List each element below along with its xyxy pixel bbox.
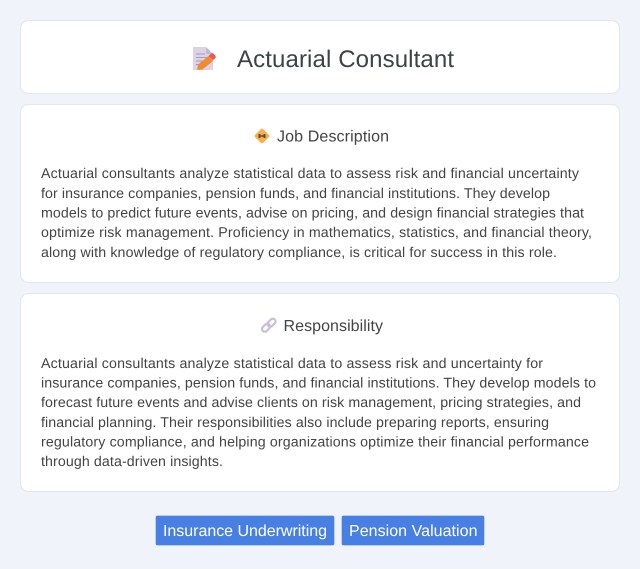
- text block: job description: optimize risk management. Proficiency in mathematics, statistics, and financial theory,: [41, 225, 592, 241]
- heading: responsibility: Responsibility: [284, 318, 383, 335]
- text block: job description: models to predict future events, advise on pricing, and design financial strategies that: [41, 206, 584, 222]
- panel: job description: [20, 104, 620, 282]
- text block: job description: Actuarial consultants analyze statistical data to assess risk and financial uncertainty: [41, 166, 580, 182]
- text block: job description: along with knowledge of regulatory compliance, is critical for success in this role.: [41, 245, 557, 261]
- text block: responsibility: Actuarial consultants analyze statistical data to assess risk and uncertainty for: [41, 356, 543, 372]
- text block: responsibility: forecast future events and advise clients on risk management, pricing strategies, and: [41, 395, 581, 411]
- icon: orange diamond: [254, 128, 270, 144]
- text block: responsibility: through data-driven insights.: [41, 454, 223, 470]
- text block: job description: [41, 166, 592, 261]
- tag: insurance underwriting: [156, 516, 334, 546]
- icon: chain link: [261, 318, 277, 333]
- tag: pension valuation: [342, 516, 484, 546]
- text block: responsibility: regulatory compliance, and helping organizations optimize their financial performance: [41, 434, 589, 450]
- title: Actuarial Consultant: [237, 46, 454, 73]
- tag: pension valuation: Pension Valuation: [349, 523, 478, 540]
- text block: responsibility: [41, 356, 596, 470]
- text block: job description: for insurance companies, pension funds, and financial institutions. They develop: [41, 186, 550, 202]
- heading: job description: Job Description: [277, 128, 389, 146]
- panel: title header: [20, 20, 620, 94]
- panel: responsibility: [20, 294, 620, 492]
- tag: insurance underwriting: Insurance Underwriting: [163, 523, 327, 540]
- icon: document with pencil: [193, 47, 216, 70]
- text block: responsibility: financial planning. Their responsibilities also include preparing reports, ensuring: [41, 415, 549, 431]
- text block: responsibility: insurance companies, pension funds, and financial institutions. They develop models to: [41, 376, 596, 392]
